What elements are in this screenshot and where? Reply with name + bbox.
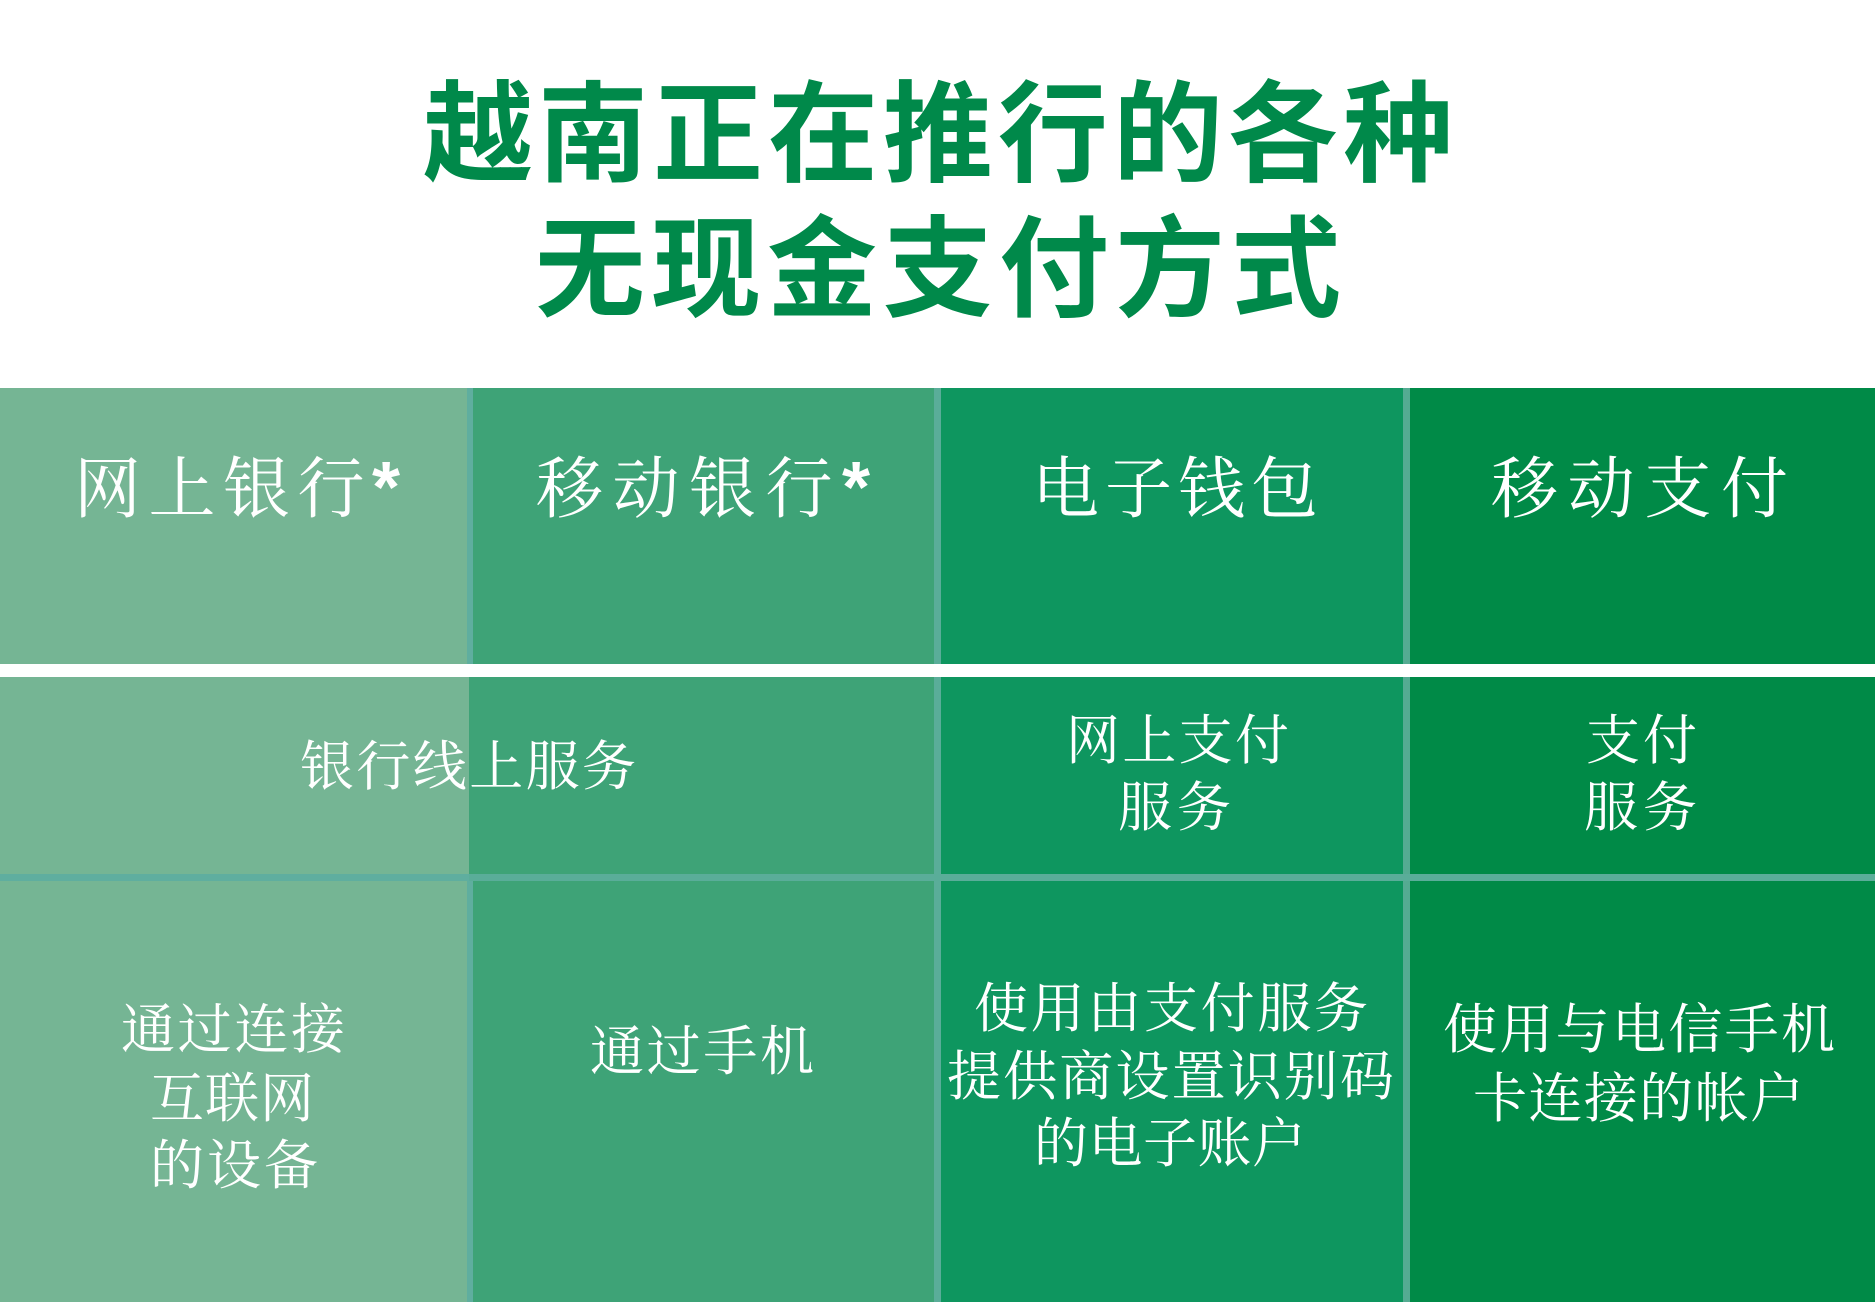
description: mobile money [1443,1000,1835,1129]
description: mobile money: 使用与电信手机 [1443,1000,1835,1060]
header: mobile money: 移动支付 [1491,453,1788,527]
header: mobile banking: 移动银行* [536,448,870,528]
header: e-wallet: 电子钱包 [1032,453,1318,527]
description: online banking: 的设备 [150,1136,318,1196]
title [423,74,1453,332]
column 4 background: mobile money [1410,388,1875,1302]
column 2 background: mobile banking [469,388,934,1302]
service type: payment services: 支付 [1586,711,1697,771]
service type: payment services [1584,711,1697,838]
header: online banking: 网上银行* [74,448,400,528]
description: e-wallet: 的电子账户 [1034,1114,1306,1174]
description: online banking: 通过连接 [121,1000,346,1060]
service type: online payment services [1066,711,1289,838]
service type: online payment services: 服务 [1118,778,1231,838]
description: e-wallet: 使用由支付服务 [974,979,1368,1039]
title: 无现金支付方式 [535,209,1341,332]
description: online banking [121,1000,346,1196]
description: e-wallet [947,979,1394,1174]
title: 越南正在推行的各种 [423,74,1453,197]
description: online banking: 互联网 [150,1069,314,1129]
description: mobile money: 卡连接的帐户 [1473,1069,1804,1129]
column 1 background: online banking [0,388,469,1302]
description: mobile banking: 通过手机 [590,1022,814,1082]
service type: online payment services: 网上支付 [1066,711,1289,771]
column 3 background: e-wallet [941,388,1403,1302]
service type: online bank services: 银行线上服务 [300,737,636,797]
service type: payment services: 服务 [1584,778,1697,838]
description: e-wallet: 提供商设置识别码 [947,1047,1394,1107]
